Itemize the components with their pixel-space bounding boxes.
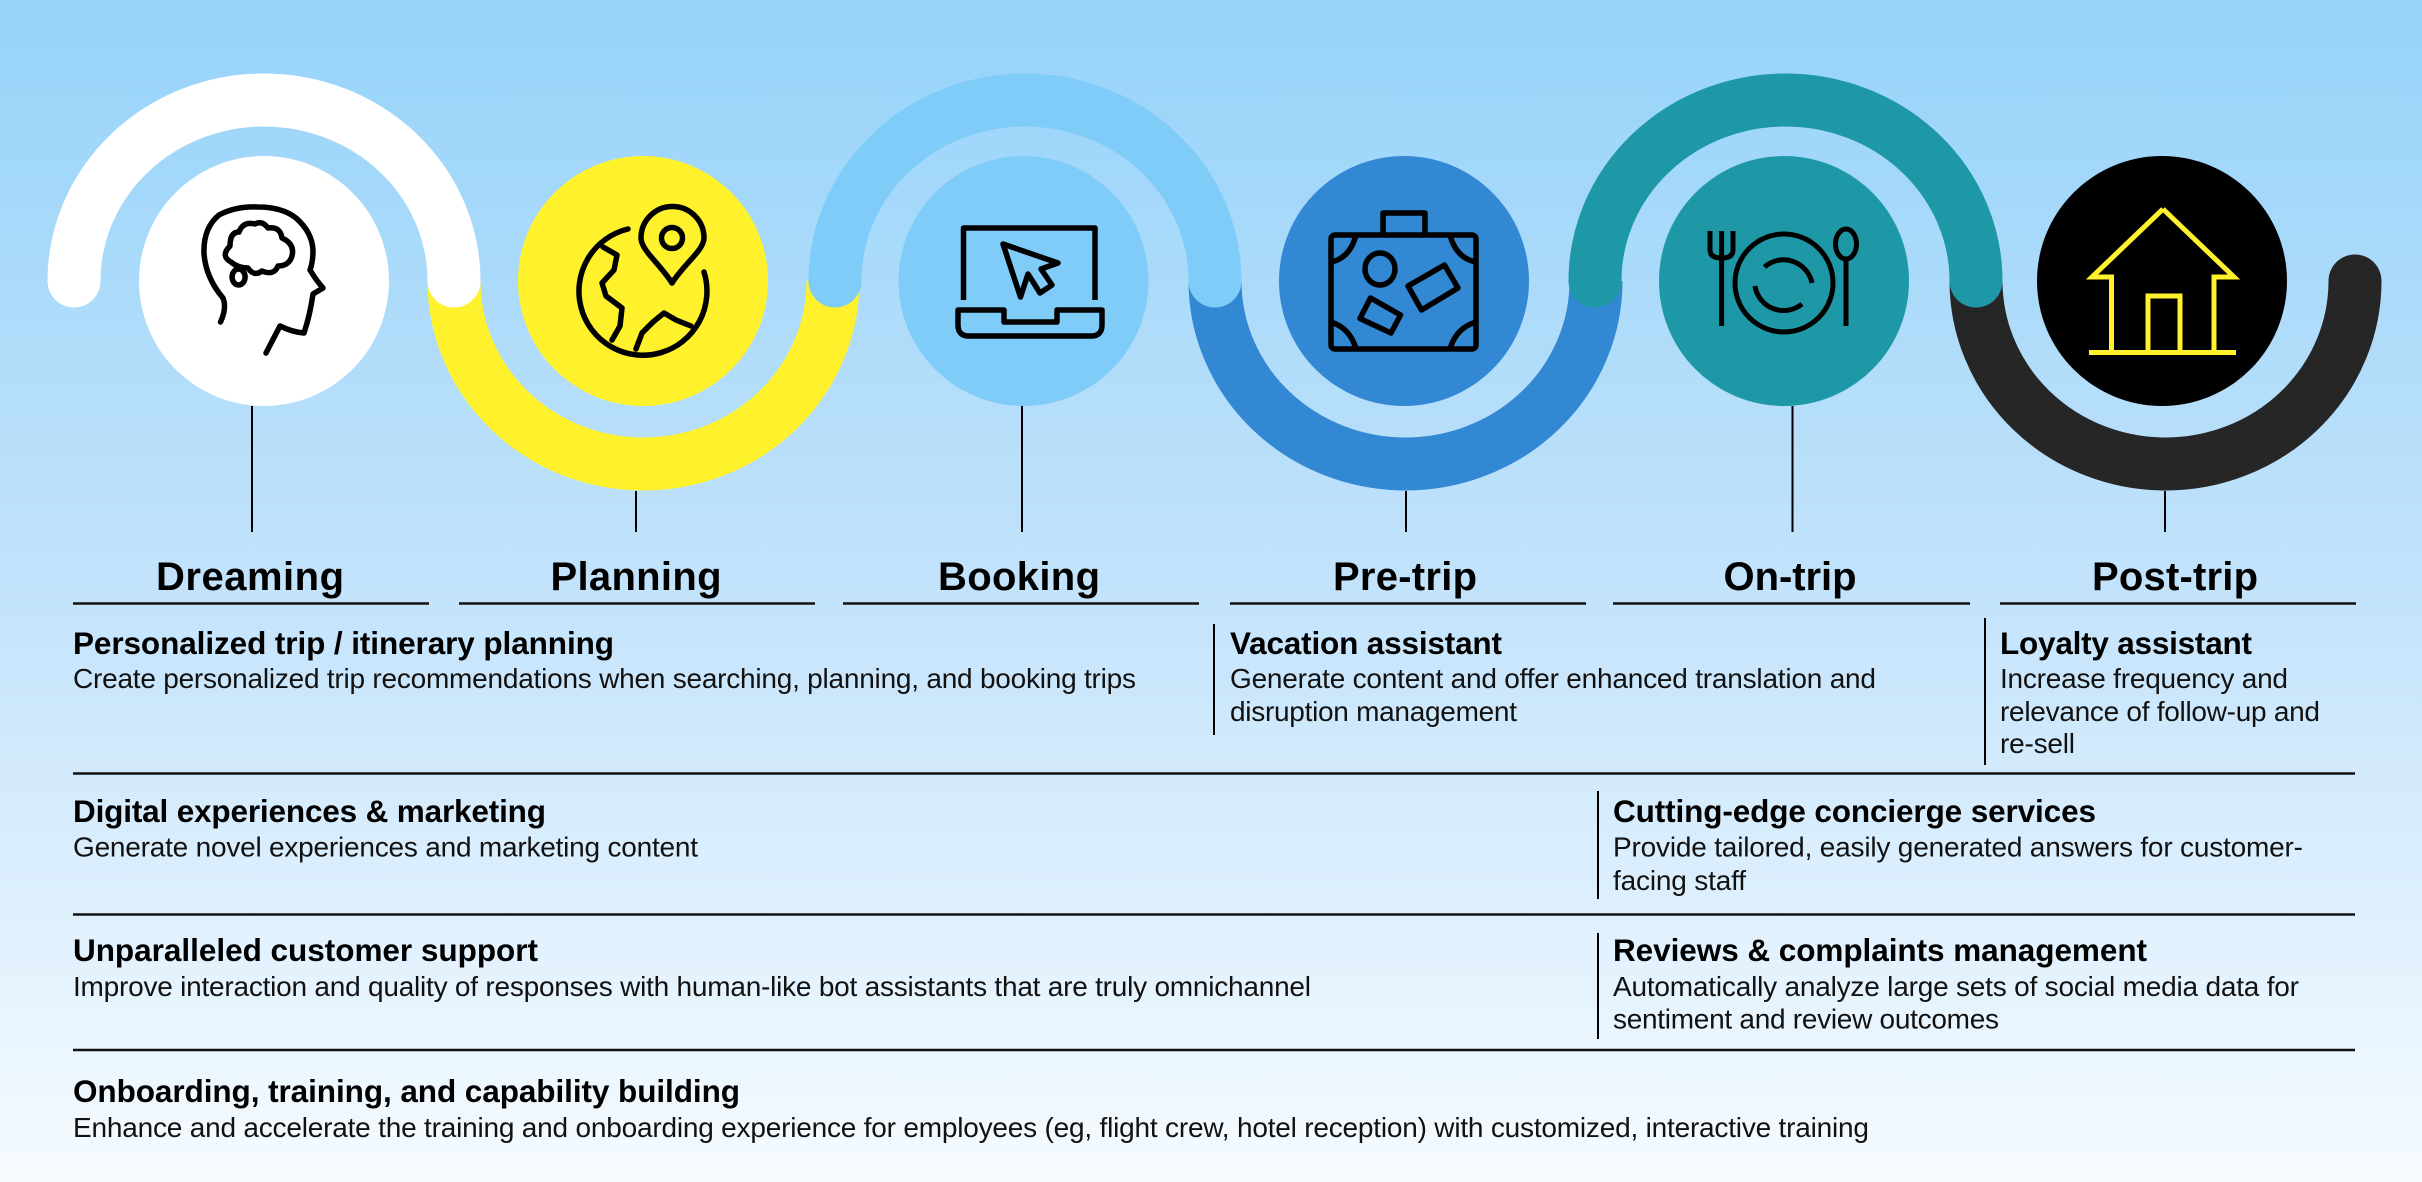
icon: laptop with cursor: [958, 228, 1102, 336]
block: personalized trip planning: Create personalized trip recommendations when searching, planning, and booking trips: [73, 663, 1136, 694]
circle: pre-trip: [1279, 156, 1529, 406]
block: digital experiences: Digital experiences & marketing: [73, 793, 546, 829]
block: customer support: Unparalleled customer support: [73, 932, 538, 968]
arc: on-trip teal: [1595, 100, 1976, 281]
heading: Planning: Planning: [550, 555, 722, 599]
block: loyalty assistant: Loyalty assistant: [2000, 625, 2252, 661]
icon: house: [2089, 209, 2236, 352]
arc: booking light blue: [835, 100, 1215, 281]
arc: pre-trip blue: [1215, 281, 1596, 464]
wave: lower arcs: [454, 281, 2355, 464]
heading: On-trip: On-trip: [1724, 555, 1856, 599]
block: digital experiences: [73, 793, 698, 862]
block: vacation assistant: [1230, 625, 1876, 727]
heading: Booking: Booking: [938, 555, 1100, 599]
circle: booking: [898, 156, 1148, 406]
block: reviews and complaints: [1613, 932, 2299, 1034]
block: vacation assistant: disruption management: [1230, 696, 1517, 727]
block: onboarding and training: Onboarding, training, and capability building: [73, 1073, 740, 1109]
block: customer support: Improve interaction and quality of responses with human-like bot assistants that are truly omnichannel: [73, 971, 1311, 1002]
block: personalized trip planning: Personalized trip / itinerary planning: [73, 625, 614, 661]
block: vacation assistant: Generate content and offer enhanced translation and: [1230, 663, 1876, 694]
arc: post-trip dark: [1976, 281, 2355, 464]
connector lines: [252, 406, 2165, 532]
icon: head with thought cloud: [204, 207, 323, 353]
block: concierge services: [1613, 793, 2303, 896]
block: loyalty assistant: Increase frequency and: [2000, 663, 2288, 694]
heading: Post-trip: Post-trip: [2092, 555, 2258, 599]
icon: plate, fork and spoon: [1710, 229, 1856, 332]
wave: upper arcs: [74, 100, 1976, 281]
stage headings: [156, 555, 2258, 599]
block: personalized trip planning: [73, 625, 1136, 694]
block: customer support: [73, 932, 1311, 1002]
block: concierge services: Cutting-edge concierge services: [1613, 793, 2096, 829]
heading: Dreaming: Dreaming: [156, 555, 344, 599]
block: reviews and complaints: sentiment and review outcomes: [1613, 1004, 1999, 1034]
block: concierge services: Provide tailored, easily generated answers for customer-: [1613, 832, 2303, 862]
block: vacation assistant: Vacation assistant: [1230, 625, 1502, 661]
arc: planning yellow: [454, 281, 833, 464]
block: concierge services: facing staff: [1613, 865, 1746, 896]
block: loyalty assistant: re-sell: [2000, 728, 2075, 759]
arc: dreaming white: [74, 100, 454, 281]
block: onboarding and training: Enhance and accelerate the training and onboarding experience for employees (eg, flight crew, hotel reception) with customized, interactive training: [73, 1112, 1869, 1143]
circle: dreaming: [139, 156, 389, 406]
circle: on-trip: [1659, 156, 1909, 406]
icon: suitcase with stickers: [1331, 213, 1476, 349]
circle: post-trip: [2037, 156, 2287, 406]
block: digital experiences: Generate novel experiences and marketing content: [73, 832, 698, 862]
block: reviews and complaints: Reviews & complaints management: [1613, 932, 2148, 968]
block: reviews and complaints: Automatically analyze large sets of social media data for: [1613, 971, 2299, 1002]
icon: globe with location pin: [579, 207, 707, 355]
block: onboarding and training: [73, 1073, 1869, 1143]
block: loyalty assistant: [2000, 625, 2320, 759]
heading: Pre-trip: Pre-trip: [1333, 555, 1477, 599]
circle: planning: [518, 156, 768, 406]
block: loyalty assistant: relevance of follow-up and: [2000, 696, 2320, 727]
